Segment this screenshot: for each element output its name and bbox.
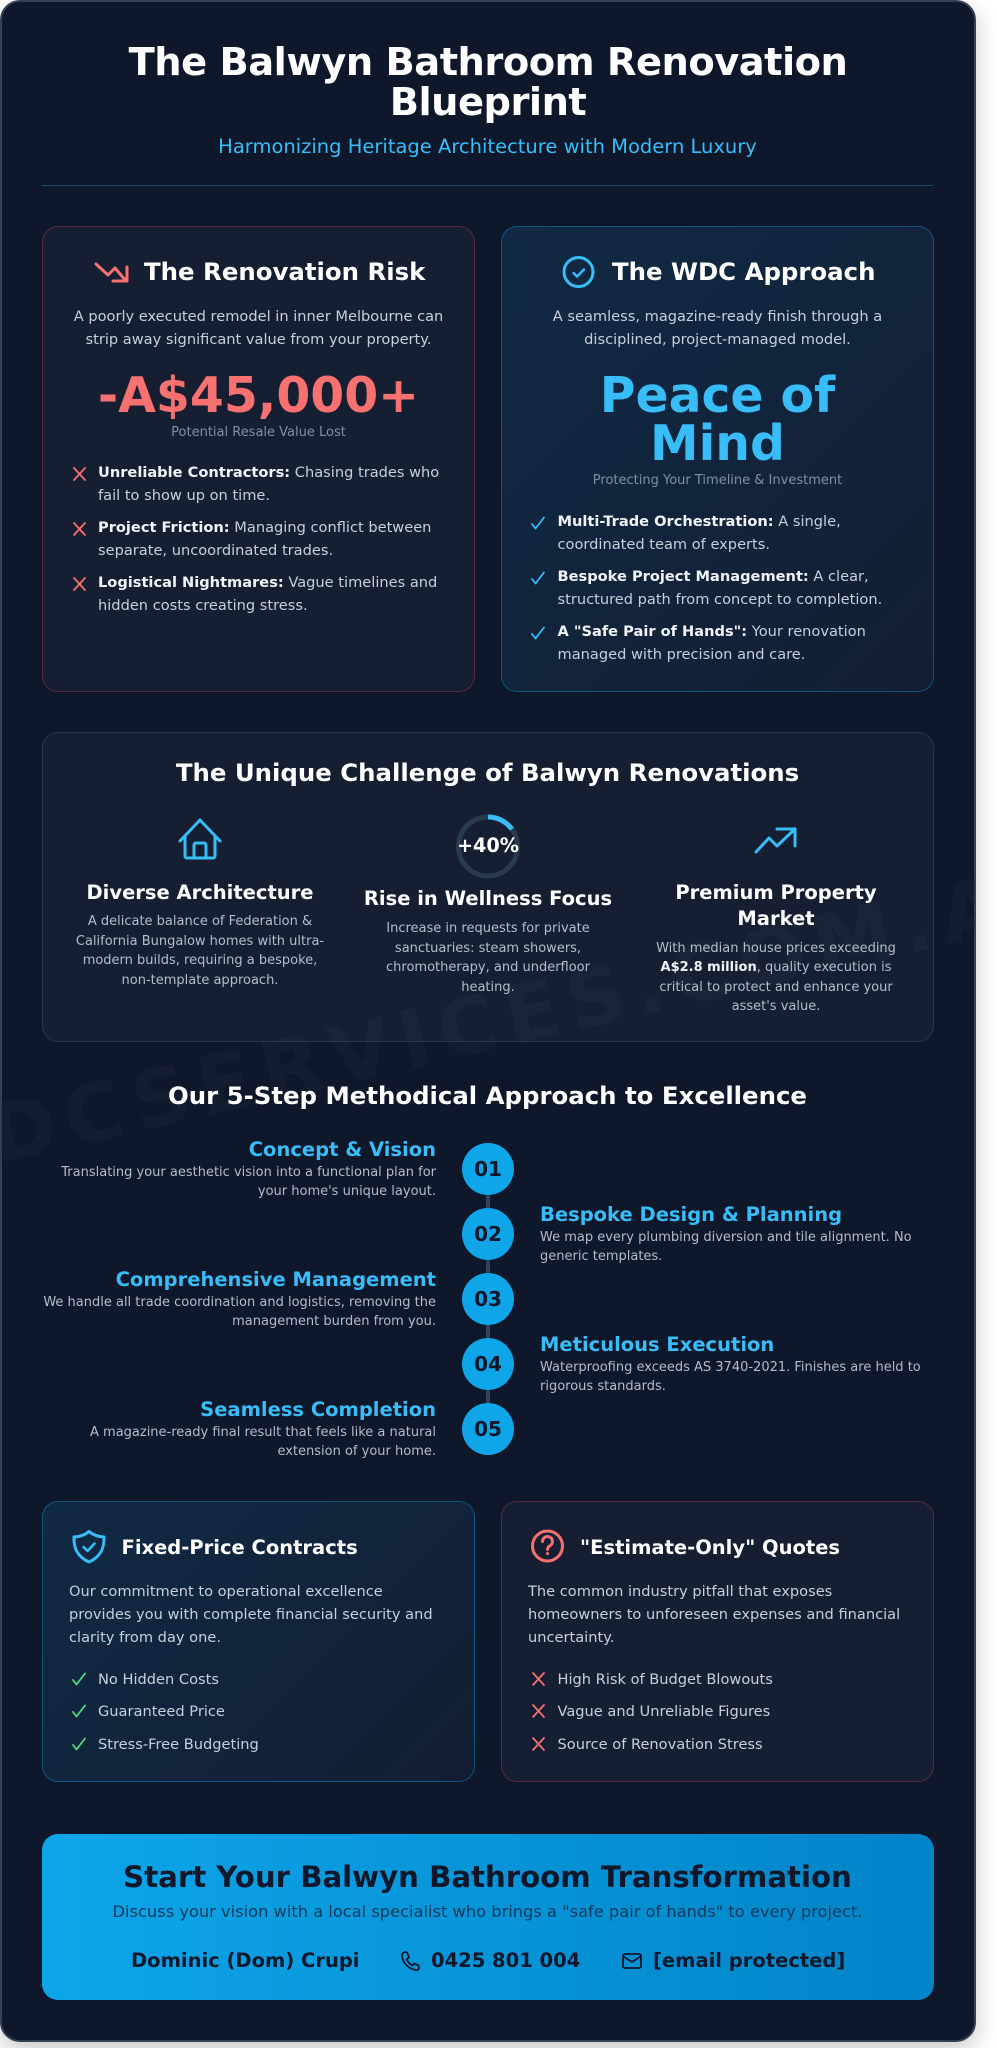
step 4 text: Meticulous Execution xyxy=(540,1333,774,1356)
text: premium market xyxy=(656,940,896,1014)
text: diverse architecture xyxy=(76,914,324,988)
heading: diverse architecture: Diverse Architecture xyxy=(86,880,314,904)
list: risks: fail to show up on time. xyxy=(98,487,270,504)
stat: value lost: -A$45,000+ xyxy=(98,367,419,424)
text: diverse architecture: modern builds, requiring a bespoke, xyxy=(83,953,317,968)
step 4 text xyxy=(540,1333,921,1394)
list item: project friction: Project Friction: Managing conflict between xyxy=(98,519,431,536)
contact: email: [email protected] xyxy=(653,1949,845,1972)
timeline line xyxy=(486,1169,490,1429)
list item: logistical nightmares xyxy=(98,574,437,614)
text: estimate-only: The common industry pitfall that exposes xyxy=(528,1583,832,1600)
contact: phone: 0425 801 004 xyxy=(431,1949,580,1972)
title: Blueprint xyxy=(390,80,586,124)
step 5 number: 05 xyxy=(474,1417,502,1441)
icon: cross xyxy=(73,522,86,536)
list item: project management xyxy=(558,568,882,608)
step 4 text: Waterproofing exceeds AS 3740-2021. Finishes are held to xyxy=(540,1360,921,1374)
text: fixed-price: Our commitment to operational excellence xyxy=(69,1583,383,1600)
icon: cross xyxy=(73,577,86,591)
heading: five steps: Our 5-Step Methodical Approach to Excellence xyxy=(168,1081,807,1110)
text: premium market: With median house prices exceeding xyxy=(656,940,896,956)
subtitle: Harmonizing Heritage Architecture with Modern Luxury xyxy=(218,135,757,158)
step 2 number xyxy=(462,1208,514,1260)
icon: question xyxy=(531,1530,564,1562)
panel: the WDC approach xyxy=(501,226,934,692)
stat label: value lost: Potential Resale Value Lost xyxy=(171,424,346,440)
step 5 text: Seamless Completion xyxy=(200,1398,436,1421)
text: wellness focus: sanctuaries: steam showers, xyxy=(395,940,581,956)
text: diverse architecture: California Bungalow homes with ultra- xyxy=(76,934,324,948)
text: premium market: critical to protect and enhance your xyxy=(659,980,893,994)
list item: vague figures: Vague and Unreliable Figures xyxy=(558,1703,770,1720)
list item: safe pair of hands xyxy=(558,623,866,663)
step 3 number xyxy=(462,1273,514,1325)
text: fixed-price: clarity from day one. xyxy=(69,1629,221,1646)
contact: name: Dominic (Dom) Crupi xyxy=(131,1949,359,1972)
stat: +40%: +40% xyxy=(457,834,519,857)
heading: premium market: Premium Property xyxy=(675,880,877,904)
heading: the renovation risk: The Renovation Risk xyxy=(144,257,425,286)
heading: fixed-price contracts: Fixed-Price Contracts xyxy=(122,1536,358,1558)
step 3 text: management burden from you. xyxy=(232,1314,436,1329)
text: approach intro: disciplined, project-managed model. xyxy=(584,331,851,348)
list item: renovation stress: Source of Renovation Stress xyxy=(558,1736,763,1753)
step 5 text: extension of your home. xyxy=(277,1444,436,1459)
text: diverse architecture: A delicate balance of Federation & xyxy=(88,914,312,929)
text: estimate-only: uncertainty. xyxy=(528,1629,614,1646)
icon: trending down xyxy=(94,262,128,283)
step 2 number: 02 xyxy=(474,1222,502,1246)
list item: multi-trade: coordinated team of experts. xyxy=(558,536,770,553)
heading: premium market: Market xyxy=(737,906,815,930)
text: wellness focus: heating. xyxy=(461,980,515,994)
step 1 number xyxy=(462,1143,514,1195)
text: risk intro xyxy=(74,308,443,348)
list item: stress-free budgeting: Stress-Free Budgeting xyxy=(98,1736,259,1753)
panel: unique challenge xyxy=(42,732,934,1042)
icon: shield xyxy=(72,1530,106,1564)
text: wellness focus xyxy=(386,921,590,994)
text: estimate-only xyxy=(528,1583,900,1646)
list item: no hidden costs: No Hidden Costs xyxy=(98,1670,219,1688)
text: premium market: A$2.8 million, quality execution is xyxy=(661,960,891,975)
icon: check xyxy=(531,626,545,640)
icon: check xyxy=(531,516,545,530)
step 3 text: Comprehensive Management xyxy=(116,1268,436,1291)
text: fixed-price xyxy=(69,1583,433,1646)
heading: wellness focus: Rise in Wellness Focus xyxy=(364,886,612,910)
step 1 text: Translating your aesthetic vision into a functional plan for xyxy=(61,1164,436,1180)
list item: logistical nightmares: Logistical Nightmares: Vague timelines and xyxy=(98,574,437,591)
step 4 number: 04 xyxy=(474,1352,502,1376)
step 2 text xyxy=(540,1203,912,1264)
icon: cross xyxy=(532,1737,545,1751)
step 1 text: your home's unique layout. xyxy=(258,1184,436,1199)
icon: green check xyxy=(72,1704,86,1718)
icon: check xyxy=(531,572,545,584)
list item: safe pair of hands: managed with precision and care. xyxy=(558,646,805,663)
text: call to action: Discuss your vision with a local specialist who brings a "safe pair of hands" to every project. xyxy=(112,1902,862,1921)
text: wellness focus: chromotherapy, and underfloor xyxy=(386,960,590,975)
icon: check circle xyxy=(562,256,594,288)
list item: multi-trade xyxy=(558,513,841,553)
step 5 text xyxy=(90,1398,436,1459)
heading: premium market xyxy=(675,880,877,930)
text: risk intro: A poorly executed remodel in inner Melbourne can xyxy=(74,308,443,325)
text: approach intro xyxy=(552,308,882,348)
icon: cross xyxy=(73,467,86,481)
step 2 text: generic templates. xyxy=(540,1249,662,1264)
text: fixed-price: provides you with complete financial security and xyxy=(69,1606,433,1623)
step 1 text xyxy=(61,1138,436,1199)
step 4 number xyxy=(462,1338,514,1390)
step 2 text: Bespoke Design & Planning xyxy=(540,1203,842,1226)
step 3 number: 03 xyxy=(474,1287,502,1311)
icon: green check xyxy=(72,1738,86,1750)
list item: project friction xyxy=(98,519,431,559)
panel: call to action xyxy=(42,1834,934,2000)
list item: guaranteed price: Guaranteed Price xyxy=(98,1703,225,1720)
title xyxy=(128,40,847,124)
heading: the WDC approach: The WDC Approach xyxy=(612,257,875,286)
step 3 text xyxy=(43,1268,436,1329)
icon: cross xyxy=(532,1672,545,1686)
stat label: peace of mind: Protecting Your Timeline & Investment xyxy=(593,473,842,488)
icon: green check xyxy=(72,1672,86,1686)
stat: peace of mind xyxy=(600,367,836,472)
text: approach intro: A seamless, magazine-ready finish through a xyxy=(553,308,882,325)
text: diverse architecture: non-template approach. xyxy=(122,972,278,988)
list item: logistical nightmares: hidden costs creating stress. xyxy=(98,597,308,614)
icon: trending up xyxy=(754,827,797,854)
text: risk intro: strip away significant value from your property. xyxy=(86,331,431,348)
stat: peace of mind: Peace of xyxy=(600,367,835,424)
step 5 number xyxy=(462,1403,514,1455)
icon: phone xyxy=(400,1951,420,1971)
list item: multi-trade: Multi-Trade Orchestration: A single, xyxy=(558,513,841,530)
list item: project management: Bespoke Project Management: A clear, xyxy=(558,568,869,585)
step 1 number: 01 xyxy=(474,1157,502,1181)
list: risks xyxy=(98,464,439,504)
list item: budget blowouts: High Risk of Budget Blowouts xyxy=(558,1670,773,1688)
step 5 text: A magazine-ready final result that feels like a natural xyxy=(90,1424,436,1440)
heading: call to action: Start Your Balwyn Bathroom Transformation xyxy=(123,1860,852,1894)
list item: project management: structured path from concept to completion. xyxy=(558,591,882,608)
list item: project friction: separate, uncoordinated trades. xyxy=(98,542,333,559)
text: estimate-only: homeowners to unforeseen expenses and financial xyxy=(528,1606,900,1623)
list: risks: Unreliable Contractors: Chasing trades who xyxy=(98,464,439,481)
step 3 text: We handle all trade coordination and logistics, removing the xyxy=(43,1294,436,1310)
panel: fixed-price contracts xyxy=(42,1501,475,1782)
panel: estimate-only quotes xyxy=(501,1501,934,1782)
list item: safe pair of hands: A "Safe Pair of Hands": Your renovation xyxy=(558,623,866,640)
step 4 text: rigorous standards. xyxy=(540,1379,666,1394)
chart: 40 percent ring xyxy=(456,814,520,878)
step 2 text: We map every plumbing diversion and tile alignment. No xyxy=(540,1230,912,1244)
icon: cross xyxy=(532,1704,545,1718)
text: wellness focus: Increase in requests for private xyxy=(386,921,590,936)
step 1 text: Concept & Vision xyxy=(249,1138,436,1161)
stat: peace of mind: Mind xyxy=(650,415,785,472)
heading: estimate-only quotes: "Estimate-Only" Quotes xyxy=(580,1536,840,1558)
title: The Balwyn Bathroom Renovation xyxy=(129,40,847,84)
icon: mail xyxy=(622,1953,642,1969)
icon: house xyxy=(178,818,222,860)
text: premium market: asset's value. xyxy=(732,999,820,1014)
panel: the renovation risk xyxy=(42,226,475,692)
heading: unique challenge: The Unique Challenge of Balwyn Renovations xyxy=(176,758,799,787)
